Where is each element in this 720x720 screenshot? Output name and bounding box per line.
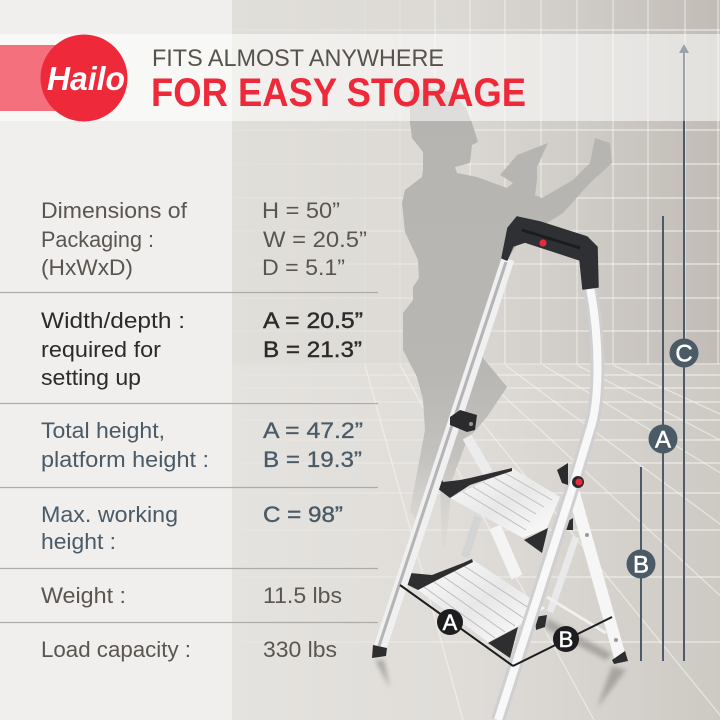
measure B on step xyxy=(513,617,612,666)
height dimension A xyxy=(648,216,678,661)
floor shadows xyxy=(375,618,626,708)
row: packaging dimensions: Dimensions of xyxy=(41,198,188,223)
logo strip xyxy=(0,45,60,111)
rear legs and braces xyxy=(465,437,620,657)
side knob xyxy=(557,463,568,485)
measure A on step: A xyxy=(443,610,458,635)
measure A on step xyxy=(400,585,513,666)
height dimension C with arrow xyxy=(670,44,698,661)
row: width and depth: Width/depth : xyxy=(41,308,185,333)
height dimension B: B xyxy=(633,552,649,578)
row: width and depth xyxy=(41,308,363,390)
row: load capacity xyxy=(41,637,337,662)
upper step xyxy=(450,468,560,538)
row: total height: Total height, xyxy=(41,418,165,443)
left panel xyxy=(0,0,232,720)
background room xyxy=(232,0,720,720)
header banner xyxy=(0,34,720,121)
row: weight xyxy=(41,583,342,608)
row: packaging dimensions xyxy=(41,198,367,280)
row: packaging dimensions: D = 5.1” xyxy=(262,255,345,280)
row: width and depth: B = 21.3” xyxy=(263,337,362,362)
right foot xyxy=(612,651,628,664)
title xyxy=(151,45,526,115)
hinge xyxy=(450,410,477,432)
silhouette of man drilling xyxy=(402,88,612,547)
row: working height: height : xyxy=(41,529,116,554)
row: total height: B = 19.3” xyxy=(263,447,362,472)
row: packaging dimensions: (HxWxD) xyxy=(41,255,133,280)
height dimension B xyxy=(626,467,656,661)
row: weight: Weight : xyxy=(41,583,126,608)
measure B on step: B xyxy=(559,627,573,652)
handle xyxy=(502,217,598,289)
lower step xyxy=(418,560,545,642)
row: width and depth: A = 20.5” xyxy=(263,308,363,333)
row: weight: 11.5 lbs xyxy=(263,583,342,608)
row: total height: A = 47.2” xyxy=(263,418,363,443)
row: load capacity: 330 lbs xyxy=(263,637,337,662)
stepladder xyxy=(372,217,628,720)
row: working height xyxy=(41,502,343,554)
curved front tube xyxy=(498,287,598,720)
row: packaging dimensions: Packaging : xyxy=(41,227,154,252)
row: width and depth: setting up xyxy=(41,365,141,390)
row: packaging dimensions: H = 50” xyxy=(262,198,340,223)
front left rail xyxy=(380,259,508,648)
row: working height: Max. working xyxy=(41,502,178,527)
left foot xyxy=(372,645,387,658)
height dimension C with arrow: C xyxy=(675,340,693,368)
title: FOR EASY STORAGE xyxy=(151,71,526,115)
title: FITS ALMOST ANYWHERE xyxy=(152,45,444,72)
row dividers xyxy=(0,292,378,622)
row: load capacity: Load capacity : xyxy=(41,637,191,662)
row: width and depth: required for xyxy=(41,337,161,362)
row: total height xyxy=(41,418,363,472)
logo: Hailo: Hailo xyxy=(47,60,125,97)
row: total height: platform height : xyxy=(41,447,209,472)
logo: Hailo xyxy=(40,34,128,122)
row: packaging dimensions: W = 20.5” xyxy=(263,227,367,252)
height dimension A: A xyxy=(655,426,671,454)
row: working height: C = 98” xyxy=(263,502,343,527)
